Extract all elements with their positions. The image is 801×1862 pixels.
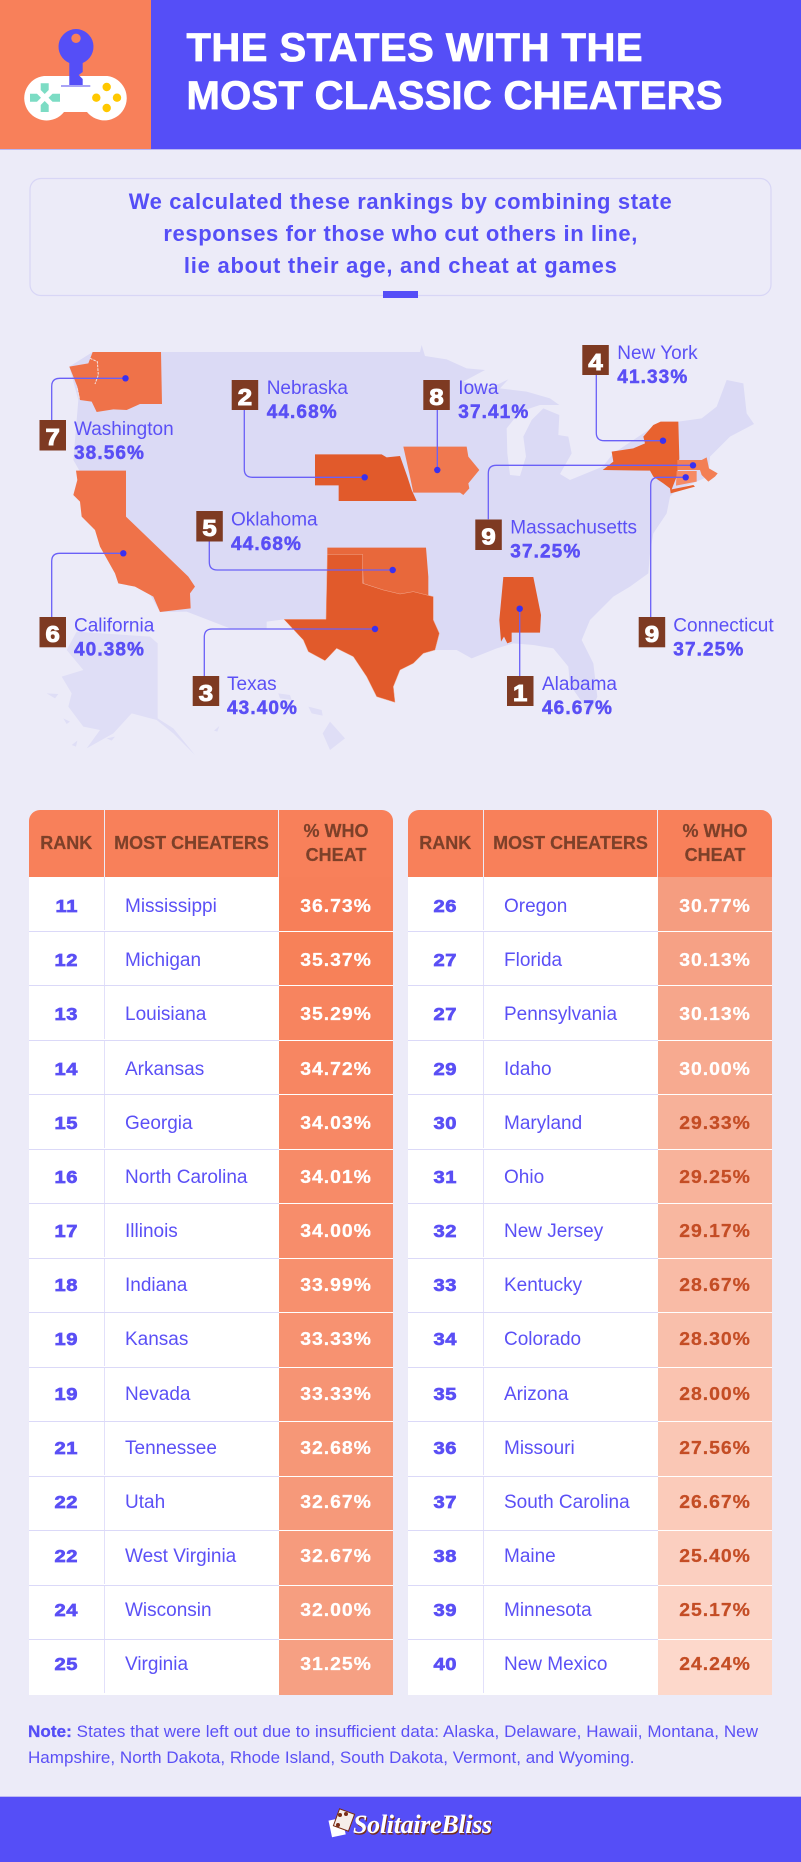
intro box: lie about their age, and cheat at games: [184, 253, 617, 278]
callout: Massachusetts rank 9: 37.25%: [510, 542, 581, 563]
state: Iowa: [403, 447, 479, 495]
note: Note: States that were left out due to insufficient data: Alaska, Delaware, Hawaii, Montana, New: [28, 1722, 759, 1741]
header: percent who cheat: [658, 810, 772, 877]
table: ranks 11 to 25: [29, 810, 393, 1695]
row 22 Utah: 22: [55, 1492, 78, 1512]
logo wordmark: SolitaireBliss: [353, 1810, 492, 1839]
row 35: [408, 1368, 772, 1422]
row 27 Pennsylvania: 30.13%: [679, 1003, 751, 1024]
row 26: 26: [434, 896, 457, 916]
row 27 Florida: 30.13%: [679, 949, 751, 970]
row 29: 30.00%: [679, 1058, 751, 1078]
row 25: Virginia: [125, 1654, 188, 1675]
row 33: 33: [434, 1275, 457, 1295]
row 12: [29, 932, 393, 986]
logo: [328, 1808, 492, 1839]
callout: Iowa rank 8: 37.41%: [458, 402, 529, 423]
row 27 Florida: [408, 932, 772, 986]
row 34: 34: [434, 1329, 457, 1349]
row 22 Utah: Utah: [125, 1492, 165, 1513]
row 14: Arkansas: [125, 1058, 204, 1080]
row 33: Kentucky: [504, 1275, 582, 1296]
row 22 Utah: 32.67%: [300, 1491, 372, 1512]
state: Texas: [284, 554, 439, 702]
row 32: 29.17%: [679, 1220, 751, 1241]
row 30: 30: [434, 1113, 457, 1133]
row 18: 33.99%: [300, 1274, 372, 1295]
row 15: 15: [55, 1113, 78, 1133]
row 16: 16: [55, 1167, 78, 1187]
row 33: 28.67%: [679, 1274, 751, 1295]
title: [186, 26, 722, 118]
title: MOST CLASSIC CHEATERS: [186, 74, 722, 118]
row 13: 13: [55, 1004, 78, 1024]
US map with rankings: [40, 343, 774, 752]
callout: California rank 6: California: [74, 616, 155, 637]
row 22 Utah: [29, 1477, 393, 1531]
row 18: Indiana: [125, 1275, 187, 1296]
row 29: Idaho: [504, 1058, 552, 1080]
callout: California rank 6: [40, 550, 155, 661]
row 37: 37: [434, 1492, 457, 1512]
header: percent who cheat: [279, 810, 393, 877]
row 37: 26.67%: [679, 1491, 751, 1512]
row 32: New Jersey: [504, 1221, 603, 1242]
row 17: 34.00%: [300, 1220, 372, 1241]
row 24: 32.00%: [300, 1599, 372, 1620]
state: Connecticut: [676, 471, 697, 486]
state: Alabama: [499, 577, 541, 643]
note: [28, 1722, 759, 1767]
row 27 Pennsylvania: 27: [434, 1004, 457, 1024]
callout: Iowa rank 8: [423, 378, 529, 473]
callout: Nebraska rank 2: [232, 378, 368, 480]
header: rank: RANK: [40, 833, 92, 853]
row 35: 28.00%: [679, 1383, 751, 1404]
row 31: 31: [434, 1167, 457, 1187]
header: most cheaters: [484, 810, 657, 877]
row 26: 30.77%: [679, 895, 751, 916]
row 12: 35.37%: [300, 949, 372, 970]
callout: New York rank 4: [582, 343, 698, 444]
row 38: 38: [434, 1546, 457, 1566]
callout: Oklahoma rank 5: Oklahoma: [231, 510, 318, 530]
row 25: [29, 1640, 393, 1695]
row 37: South Carolina: [504, 1492, 630, 1513]
callout: California rank 6: 40.38%: [74, 640, 145, 661]
row 27 Pennsylvania: [408, 986, 772, 1041]
row 38: [408, 1531, 772, 1586]
row 21: 32.68%: [300, 1437, 372, 1458]
callout: New York rank 4: New York: [617, 343, 698, 364]
callout: Texas rank 3: 3: [199, 681, 213, 707]
row 35: 35: [434, 1384, 457, 1404]
callout: Alabama rank 1: 1: [513, 681, 527, 707]
header: percent who cheat: % WHO: [304, 820, 368, 840]
header: percent who cheat: % WHO: [682, 820, 748, 840]
row 19 Nevada: 33.33%: [300, 1383, 372, 1404]
row 19 Nevada: [29, 1368, 393, 1422]
callout: Alabama rank 1: [507, 606, 617, 719]
note: Hampshire, North Dakota, Rhode Island, South Dakota, Vermont, and Wyoming.: [28, 1748, 634, 1767]
header: rank: RANK: [419, 833, 471, 853]
row 12: 12: [55, 950, 78, 970]
row 11: Mississippi: [125, 896, 217, 917]
row 36: 36: [434, 1438, 457, 1458]
callout: Iowa rank 8: 8: [429, 385, 444, 411]
row 11: 11: [55, 896, 78, 916]
state: New York: [603, 422, 695, 493]
callout: Texas rank 3: 43.40%: [227, 698, 298, 719]
row 38: 25.40%: [679, 1545, 751, 1566]
row 22 West Virginia: 22: [55, 1546, 78, 1566]
callout: Nebraska rank 2: Nebraska: [267, 378, 348, 399]
callout: Washington rank 7: 38.56%: [74, 443, 145, 464]
row 36: Missouri: [504, 1438, 575, 1459]
row 26: Oregon: [504, 896, 567, 917]
header banner: [0, 0, 801, 150]
row 27 Florida: 27: [434, 950, 457, 970]
row 21: Tennessee: [125, 1438, 217, 1459]
row 15: [29, 1095, 393, 1150]
row 34: [408, 1313, 772, 1368]
state: California: [73, 471, 195, 612]
row 33: [408, 1259, 772, 1313]
intro box: [30, 178, 772, 298]
header: percent who cheat: CHEAT: [306, 845, 366, 865]
row 19 Kansas: 33.33%: [300, 1328, 372, 1349]
row 17: 17: [55, 1221, 78, 1241]
callout: Nebraska rank 2: 2: [238, 385, 252, 411]
row 40: 40: [434, 1654, 457, 1674]
row 37: [408, 1477, 772, 1531]
callout: Massachusetts rank 9: Massachusetts: [510, 518, 637, 538]
row 22 West Virginia: 32.67%: [300, 1545, 372, 1566]
row 34: Colorado: [504, 1329, 581, 1350]
row 39: 39: [434, 1600, 457, 1620]
row 29: 29: [434, 1058, 457, 1078]
row 22 West Virginia: [29, 1531, 393, 1586]
row 24: 24: [55, 1600, 78, 1620]
callout: Oklahoma rank 5: 5: [202, 516, 217, 542]
row 27 Florida: Florida: [504, 950, 562, 971]
row 39: 25.17%: [679, 1599, 751, 1620]
row 19 Nevada: Nevada: [125, 1384, 190, 1405]
row 40: [408, 1640, 772, 1695]
callout: Massachusetts rank 9: 9: [481, 525, 496, 550]
callout: Washington rank 7: Washington: [74, 419, 174, 440]
state: Massachusetts: [677, 457, 718, 482]
callout: Iowa rank 8: Iowa: [458, 378, 499, 399]
title: THE STATES WITH THE: [186, 26, 642, 70]
row 21: 21: [55, 1438, 78, 1458]
row 18: [29, 1259, 393, 1313]
row 40: 24.24%: [679, 1653, 751, 1674]
row 18: 18: [55, 1275, 78, 1295]
row 17: Illinois: [125, 1221, 178, 1242]
row 30: [408, 1095, 772, 1150]
row 11: 36.73%: [300, 895, 372, 916]
row 11: [29, 877, 393, 932]
row 14: 34.72%: [300, 1058, 372, 1078]
callout: Oklahoma rank 5: [196, 510, 396, 573]
row 39: [408, 1586, 772, 1640]
row 31: 29.25%: [679, 1166, 751, 1187]
callout: Connecticut rank 9: Connecticut: [673, 616, 774, 637]
row 16: [29, 1150, 393, 1204]
callout: Texas rank 3: [193, 626, 378, 719]
callout: Texas rank 3: Texas: [227, 674, 277, 695]
row 32: [408, 1204, 772, 1259]
row 39: Minnesota: [504, 1600, 592, 1621]
row 12: Michigan: [125, 950, 201, 971]
callout: New York rank 4: 4: [588, 350, 603, 376]
callout: Connecticut rank 9: [639, 474, 774, 661]
row 19 Kansas: Kansas: [125, 1329, 188, 1350]
callout: Washington rank 7: [40, 375, 174, 464]
row 36: 27.56%: [679, 1437, 751, 1458]
callout: Washington rank 7: 7: [46, 425, 60, 451]
row 21: [29, 1422, 393, 1477]
header: most cheaters: MOST CHEATERS: [493, 833, 648, 853]
header: rank: [29, 810, 104, 877]
row 15: 34.03%: [300, 1112, 372, 1133]
callout: New York rank 4: 41.33%: [617, 367, 688, 388]
row 24: [29, 1586, 393, 1640]
state: Washington: [69, 352, 162, 412]
row 13: [29, 986, 393, 1041]
row 25: 31.25%: [300, 1653, 372, 1674]
header: most cheaters: MOST CHEATERS: [114, 833, 269, 853]
row 27 Pennsylvania: Pennsylvania: [504, 1004, 617, 1025]
row 19 Nevada: 19: [55, 1384, 78, 1404]
table: ranks 26 to 40: [408, 810, 772, 1695]
intro box: We calculated these rankings by combining state: [129, 189, 672, 214]
row 16: North Carolina: [125, 1167, 248, 1188]
callout: California rank 6: 6: [46, 622, 60, 648]
state: Oklahoma: [327, 548, 428, 597]
row 19 Kansas: 19: [55, 1329, 78, 1349]
callout: Nebraska rank 2: 44.68%: [267, 402, 338, 423]
row 14: [29, 1041, 393, 1095]
row 13: 35.29%: [300, 1003, 372, 1024]
row 14: 14: [55, 1058, 78, 1078]
row 32: 32: [434, 1221, 457, 1241]
row 24: Wisconsin: [125, 1600, 212, 1621]
row 16: 34.01%: [300, 1166, 372, 1187]
header: most cheaters: [105, 810, 278, 877]
row 30: 29.33%: [679, 1112, 751, 1133]
row 40: New Mexico: [504, 1654, 607, 1675]
row 36: [408, 1422, 772, 1477]
row 29: [408, 1041, 772, 1095]
row 38: Maine: [504, 1546, 556, 1567]
map: base United States, Alaska, Hawaii: [47, 345, 754, 755]
row 30: Maryland: [504, 1113, 582, 1134]
header: percent who cheat: CHEAT: [685, 845, 745, 865]
row 35: Arizona: [504, 1384, 568, 1405]
row 26: [408, 877, 772, 932]
row 31: Ohio: [504, 1167, 544, 1188]
row 19 Kansas: [29, 1313, 393, 1368]
row 15: Georgia: [125, 1113, 193, 1134]
callout: Massachusetts rank 9: [475, 462, 696, 563]
row 17: [29, 1204, 393, 1259]
row 25: 25: [55, 1654, 78, 1674]
header: rank: [408, 810, 482, 877]
intro box: responses for those who cut others in line,: [163, 221, 637, 246]
state: Nebraska: [315, 454, 417, 501]
row 13: Louisiana: [125, 1004, 206, 1025]
callout: Alabama rank 1: 46.67%: [542, 698, 613, 719]
icon panel: game controller: [0, 0, 151, 149]
logo icon: cards: [328, 1808, 356, 1838]
footer: [0, 1796, 801, 1862]
row 34: 28.30%: [679, 1328, 751, 1349]
callout: Connecticut rank 9: 9: [645, 622, 659, 648]
row 31: [408, 1150, 772, 1204]
row 22 West Virginia: West Virginia: [125, 1546, 236, 1567]
callout: Oklahoma rank 5: 44.68%: [231, 534, 302, 555]
callout: Connecticut rank 9: 37.25%: [673, 640, 744, 661]
callout: Alabama rank 1: Alabama: [542, 674, 617, 695]
